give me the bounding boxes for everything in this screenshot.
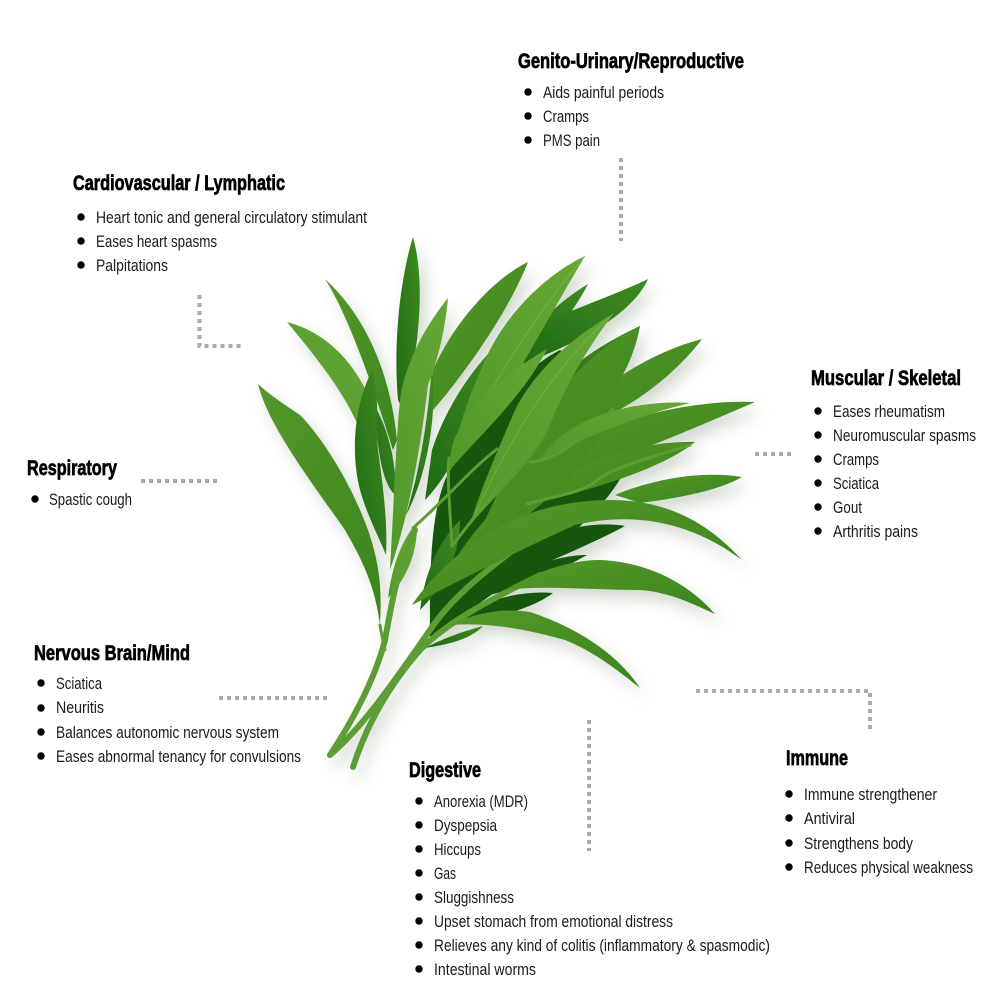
list: digestive: Upset stomach from emotional distress bbox=[434, 912, 673, 931]
plant illustration: tarragon sprig bbox=[258, 237, 755, 767]
list: muscular: Gout bbox=[833, 498, 862, 517]
list: cardiovascular: Heart tonic and general circulatory stimulant bbox=[96, 208, 367, 227]
heading: respiratory: Respiratory bbox=[27, 457, 117, 480]
list: immune bbox=[785, 785, 973, 877]
connector: digestive bbox=[587, 720, 591, 851]
panel: nervous bbox=[34, 642, 301, 766]
panel: digestive bbox=[409, 759, 770, 979]
list: digestive: Relieves any kind of colitis (inflammatory & spasmodic) bbox=[434, 936, 770, 955]
connector: immune bbox=[696, 691, 870, 733]
list: muscular bbox=[814, 402, 976, 541]
list: respiratory: Spastic cough bbox=[49, 490, 132, 509]
list: digestive: Intestinal worms bbox=[434, 960, 536, 979]
list: nervous: Eases abnormal tenancy for convulsions bbox=[56, 747, 301, 766]
list: muscular: Sciatica bbox=[833, 474, 879, 493]
list: muscular: Arthritis pains bbox=[833, 522, 918, 541]
connector: nervous bbox=[219, 696, 327, 700]
list: genito-urinary: Cramps bbox=[543, 107, 589, 126]
panel: genito-urinary bbox=[518, 50, 744, 150]
list: immune: Strengthens body bbox=[804, 834, 913, 853]
list: cardiovascular: Eases heart spasms bbox=[96, 232, 217, 251]
list: digestive: Hiccups bbox=[434, 840, 481, 859]
list: digestive: Sluggishness bbox=[434, 888, 514, 907]
list: digestive: Dyspepsia bbox=[434, 816, 497, 835]
list: muscular: Eases rheumatism bbox=[833, 402, 945, 421]
panel: respiratory bbox=[27, 457, 132, 509]
list: nervous: Neuritis bbox=[56, 698, 104, 717]
list: muscular: Cramps bbox=[833, 450, 879, 469]
panel: muscular bbox=[811, 367, 976, 541]
heading: immune: Immune bbox=[786, 747, 848, 770]
list: digestive: Anorexia (MDR) bbox=[434, 792, 528, 811]
list: nervous: Sciatica bbox=[56, 674, 102, 693]
connector: genito-urinary bbox=[619, 158, 623, 241]
heading: nervous: Nervous Brain/Mind bbox=[34, 642, 190, 665]
list: digestive bbox=[415, 792, 770, 979]
heading: cardiovascular: Cardiovascular / Lymphatic bbox=[73, 172, 285, 195]
list: genito-urinary: PMS pain bbox=[543, 131, 600, 150]
connector: muscular bbox=[755, 452, 791, 456]
connector: respiratory bbox=[141, 479, 217, 483]
panel: immune bbox=[785, 747, 973, 877]
list: nervous: Balances autonomic nervous system bbox=[56, 723, 279, 742]
list: digestive: Gas bbox=[434, 864, 456, 883]
panel: cardiovascular bbox=[73, 172, 367, 275]
heading: muscular: Muscular / Skeletal bbox=[811, 367, 961, 390]
heading: genito-urinary: Genito-Urinary/Reproductive bbox=[518, 50, 744, 73]
list: genito-urinary bbox=[524, 83, 664, 150]
list: cardiovascular: Palpitations bbox=[96, 256, 168, 275]
list: cardiovascular bbox=[77, 208, 367, 275]
list: genito-urinary: Aids painful periods bbox=[543, 83, 664, 102]
list: immune: Immune strengthener bbox=[804, 785, 937, 804]
heading: digestive: Digestive bbox=[409, 759, 481, 782]
list: immune: Antiviral bbox=[804, 809, 855, 828]
connector: cardiovascular bbox=[200, 295, 242, 346]
list: nervous bbox=[37, 674, 301, 766]
